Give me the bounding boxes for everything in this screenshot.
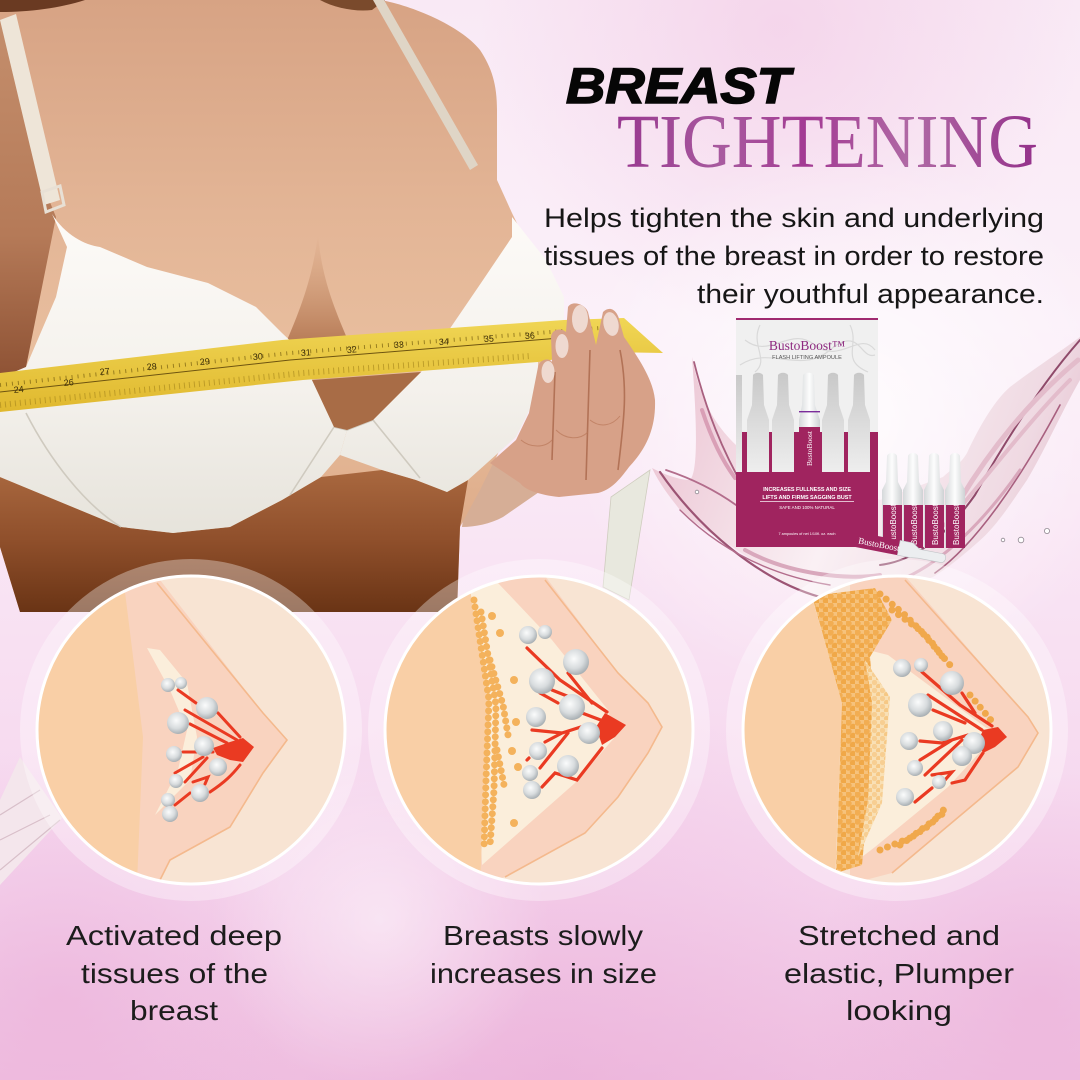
- circle 1: deep tissues: [20, 559, 362, 901]
- measuring tape: 24: [13, 384, 24, 395]
- product box: BustoBoost: [805, 430, 814, 466]
- caption 3: [784, 920, 1014, 1026]
- ampoules: BustoBoost: [857, 536, 901, 553]
- title: TIGHTENING: [617, 100, 1038, 184]
- caption 1: tissues of the: [81, 958, 268, 989]
- caption 3: looking: [846, 995, 952, 1026]
- hand: [490, 303, 655, 497]
- ampoules: [854, 453, 965, 564]
- product box: FLASH LIFTING AMPOULE: [772, 355, 842, 361]
- forearm: [462, 463, 542, 527]
- product box: [736, 318, 878, 547]
- product box: INCREASES FULLNESS AND SIZE: [763, 487, 851, 493]
- circle 3: plumper: [726, 559, 1068, 901]
- caption 2: Breasts slowly: [443, 920, 643, 951]
- torso: [0, 0, 564, 612]
- measuring tape: 28: [146, 361, 157, 372]
- description text: [544, 203, 1044, 309]
- left cup: [0, 214, 347, 533]
- water splash: [0, 337, 1080, 885]
- measuring tape: 34: [439, 336, 449, 347]
- ampoules: BustoBoost: [910, 503, 919, 545]
- description text: Helps tighten the skin and underlying: [544, 203, 1044, 233]
- measuring tape: 29: [199, 356, 210, 367]
- measuring tape: 30: [252, 351, 263, 362]
- garment: [0, 0, 564, 533]
- measuring tape: 26: [63, 377, 74, 388]
- caption 3: Stretched and: [798, 920, 1000, 951]
- caption 1: Activated deep: [66, 920, 282, 951]
- product box: BustoBoost™: [769, 338, 845, 353]
- measuring tape: 33: [394, 339, 404, 350]
- hair: [0, 0, 85, 12]
- dangling tape end: [603, 470, 650, 600]
- description text: their youthful appearance.: [697, 279, 1044, 309]
- caption 2: increases in size: [430, 958, 657, 989]
- measuring tape: [0, 318, 663, 412]
- ampoules: BustoBoost: [889, 503, 898, 545]
- measuring tape: 35: [484, 333, 494, 344]
- photo: figure with measuring tape: [0, 0, 663, 612]
- description text: tissues of the breast in order to restore: [544, 241, 1044, 271]
- right cup: [340, 217, 564, 492]
- caption 1: breast: [130, 995, 218, 1026]
- product box: 7 ampoules of net 1/10fl. oz. each: [778, 532, 836, 536]
- measuring tape: 31: [300, 347, 311, 358]
- left arm shade: [0, 20, 56, 378]
- caption 2: [430, 920, 657, 989]
- title: BREAST: [566, 58, 795, 114]
- measuring tape: 36: [525, 330, 535, 341]
- product box: SAFE AND 100% NATURAL: [779, 505, 835, 510]
- circle 2: slow increase: [368, 559, 710, 901]
- product box: LIFTS AND FIRMS SAGGING BUST: [762, 495, 852, 501]
- measuring tape: 32: [346, 344, 357, 355]
- caption 3: elastic, Plumper: [784, 958, 1014, 989]
- measuring tape: 27: [99, 366, 110, 377]
- ampoules: BustoBoost: [931, 503, 940, 545]
- belly: [0, 470, 468, 612]
- caption 1: [66, 920, 282, 1026]
- ampoules: BustoBoost: [952, 503, 961, 545]
- title: [566, 58, 1038, 184]
